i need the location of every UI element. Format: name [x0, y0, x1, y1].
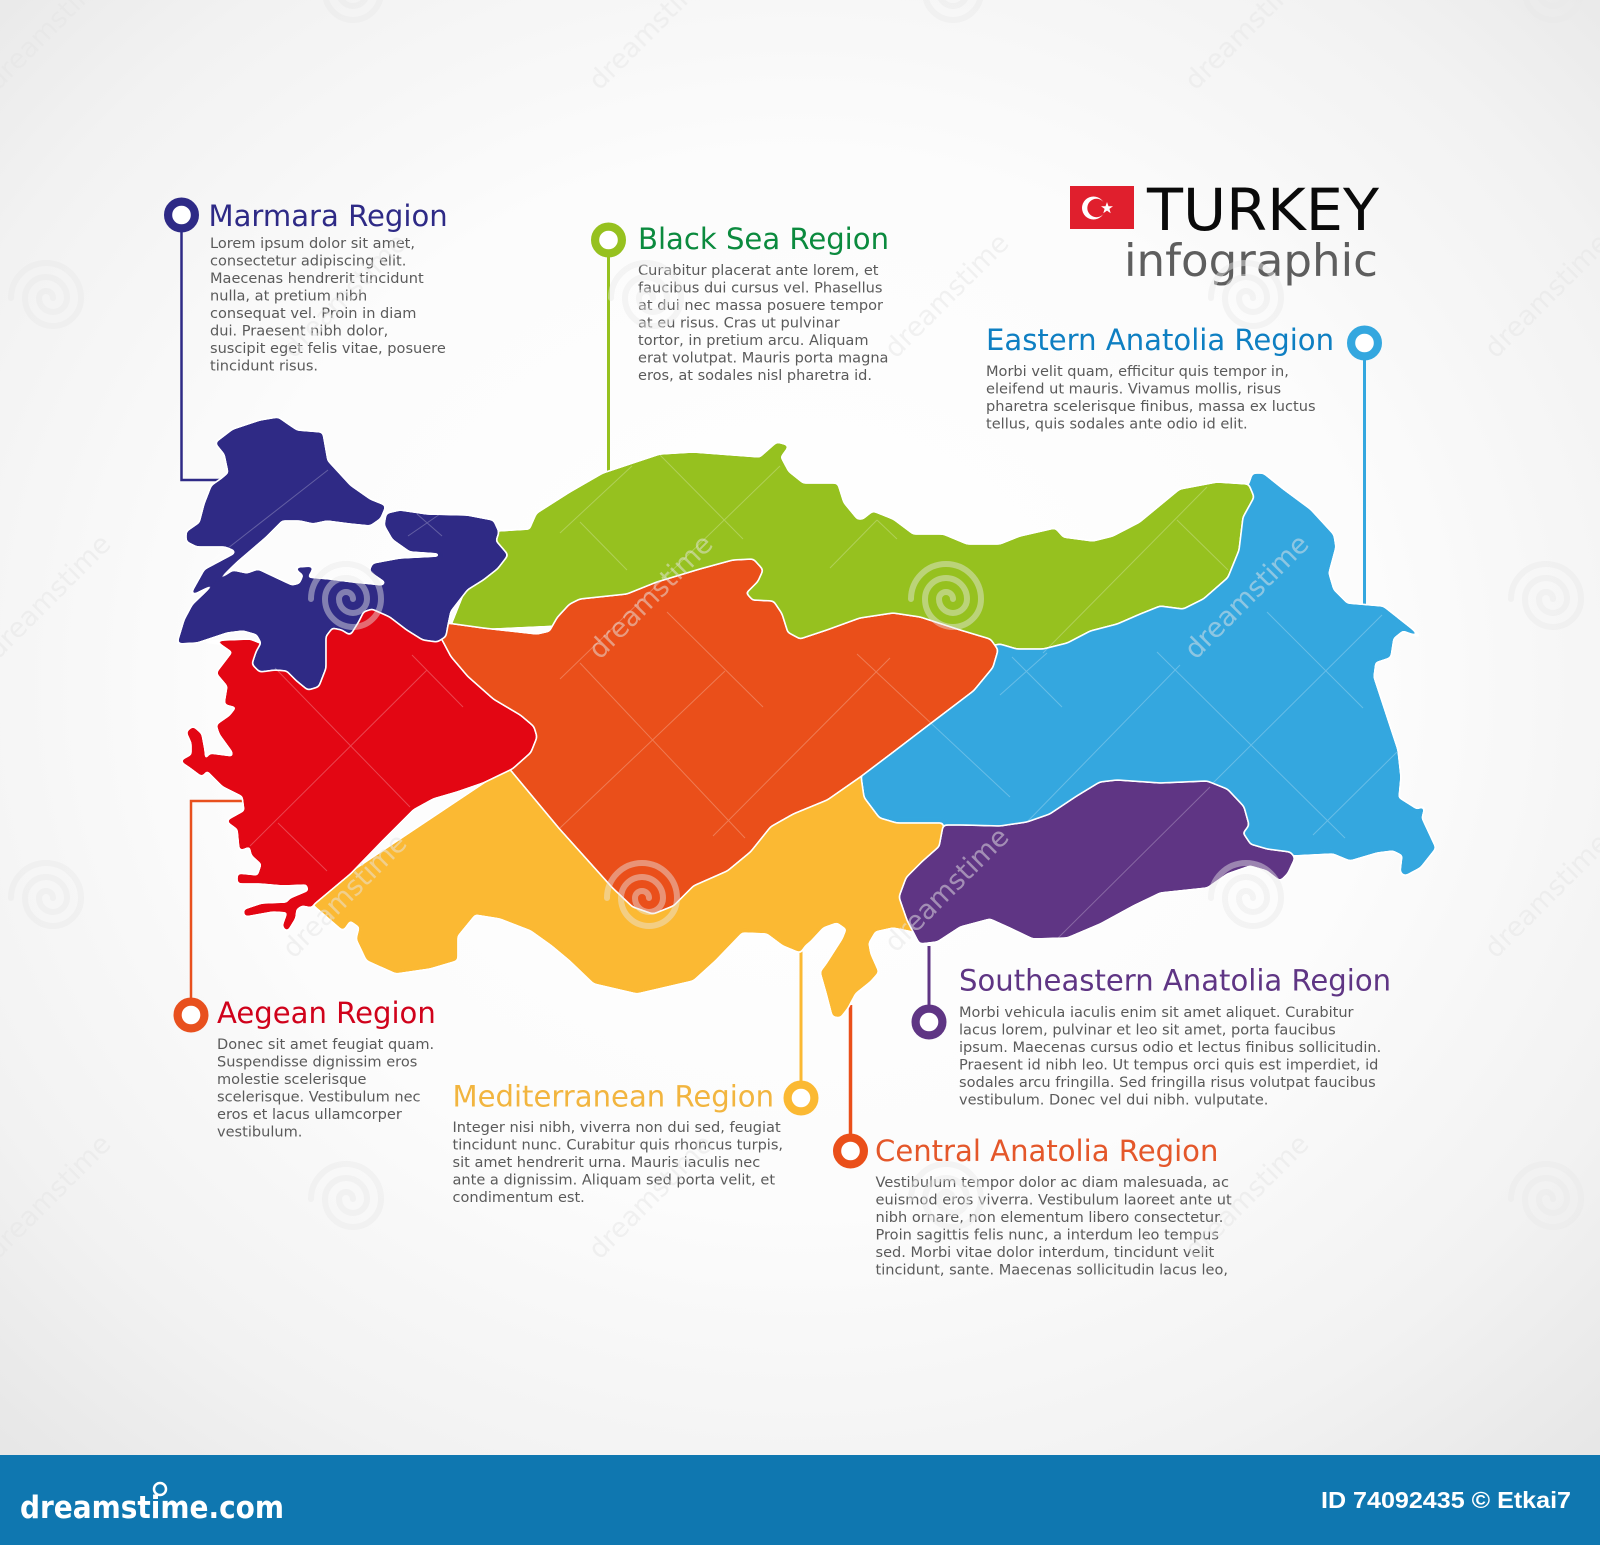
watermark spirals — [11, 0, 1581, 1227]
region: Marmara — [178, 418, 507, 689]
region: Aegean — [181, 605, 536, 931]
watermark text: dreamstime — [1179, 1129, 1315, 1265]
watermark text: dreamstime — [277, 828, 413, 964]
text block: Central Anatolia: Vestibulum tempor dolor ac diam malesuada, ac — [876, 1174, 1229, 1191]
text block: Southeastern Anatolia: ipsum. Maecenas cursus odio et lectus finibus sollicitudin. — [959, 1039, 1381, 1056]
text block: Marmara: consectetur adipiscing elit. — [210, 252, 406, 270]
text block: Central Anatolia: Proin sagittis felis nunc, a interdum leo tempus — [876, 1226, 1219, 1244]
text block: Southeastern Anatolia: sodales arcu fringilla. Sed fringilla risus volutpat faucibus — [959, 1074, 1376, 1091]
text block: Southeastern Anatolia: lacus lorem, pulvinar et leo sit amet, porta faucibus — [959, 1022, 1336, 1038]
text block: Aegean — [217, 996, 436, 1140]
region: Mediterranean — [313, 760, 950, 1017]
text block: Marmara: tincidunt risus. — [210, 358, 318, 374]
text block: Central Anatolia — [875, 1134, 1232, 1278]
text block: Central Anatolia: Central Anatolia Region — [875, 1134, 1218, 1168]
text block: Mediterranean: tincidunt nunc. Curabitur quis rhoncus turpis, — [452, 1136, 783, 1154]
text block: Marmara: Maecenas hendrerit tincidunt — [210, 270, 424, 287]
text block: Mediterranean: sit amet hendrerit urna. Mauris iaculis nec — [452, 1154, 760, 1171]
text block: Black Sea: erat volutpat. Mauris porta magna — [638, 350, 888, 366]
text block: Black Sea: tortor, in pretium arcu. Aliquam — [638, 332, 869, 349]
icon: Turkish flag — [1070, 186, 1134, 229]
leader line: Eastern Anatolia — [1363, 343, 1366, 606]
ring: Southeastern Anatolia — [916, 1009, 942, 1035]
text block: Eastern Anatolia: Eastern Anatolia Region — [986, 323, 1334, 357]
text block: Marmara: Lorem ipsum dolor sit amet, — [210, 235, 415, 252]
region: Eastern Anatolia — [862, 474, 1435, 875]
text block: Marmara: Marmara Region — [208, 199, 448, 233]
text block: Eastern Anatolia: tellus, quis sodales ante odio id elit. — [986, 416, 1248, 432]
text block: Aegean: scelerisque. Vestibulum nec — [217, 1088, 421, 1106]
text block: Mediterranean: ante a dignissim. Aliquam sed porta velit, et — [452, 1172, 775, 1188]
text block: Marmara: nulla, at pretium nibh — [210, 288, 367, 304]
text block: Mediterranean: condimentum est. — [452, 1189, 585, 1206]
text block: Black Sea: at eu risus. Cras ut pulvinar — [638, 314, 840, 332]
text block: Marmara: dui. Praesent nibh dolor, — [210, 322, 388, 340]
text block: Black Sea: Black Sea Region — [638, 222, 889, 256]
watermark text: dreamstime — [277, 228, 413, 364]
text block: Central Anatolia: nibh ornare, non elementum libero consectetur. — [876, 1209, 1223, 1226]
text block: Aegean: vestibulum. — [217, 1124, 302, 1140]
watermark text: dreamstime — [583, 1129, 719, 1265]
text block: Aegean: eros et lacus ullamcorper — [217, 1106, 402, 1123]
title: infographic — [1124, 235, 1378, 287]
text block: Aegean: Aegean Region — [217, 996, 436, 1030]
text block: Southeastern Anatolia: Praesent id nibh leo. Ut tempus orci quis est imperdiet, id — [959, 1056, 1378, 1074]
text block: Marmara: suscipit eget felis vitae, posuere — [210, 340, 446, 357]
leader line: Black Sea — [607, 240, 610, 472]
text block: Eastern Anatolia: Morbi velit quam, efficitur quis tempor in, — [986, 363, 1289, 380]
ring: Marmara — [168, 202, 195, 228]
ring: Aegean — [178, 1002, 204, 1028]
ring: Mediterranean — [788, 1085, 814, 1111]
text block: Black Sea: at dui nec massa posuere tempor — [638, 297, 883, 314]
text block: Black Sea — [638, 222, 889, 384]
watermark text: dreamstime — [1179, 529, 1315, 665]
text block: Marmara — [208, 199, 448, 374]
ring: Black Sea — [595, 227, 622, 253]
title — [1124, 176, 1380, 287]
footer logo: dreamstime.com — [20, 1490, 284, 1526]
leader line: Aegean — [191, 801, 246, 1015]
text block: Black Sea: Curabitur placerat ante lorem, et — [638, 262, 879, 279]
region: Southeastern Anatolia — [900, 781, 1294, 943]
text block: Aegean: Suspendisse dignissim eros — [217, 1054, 417, 1070]
text block: Southeastern Anatolia — [959, 964, 1391, 1108]
footer credit: ID 74092435 © Etkai7 — [1321, 1487, 1571, 1513]
leader line: Marmara — [182, 215, 224, 480]
watermark text: dreamstime — [583, 529, 719, 665]
map of Turkey — [178, 418, 1435, 1017]
text block: Southeastern Anatolia: vestibulum. Donec vel dui nibh. vulputate. — [959, 1092, 1268, 1108]
text block: Black Sea: faucibus dui cursus vel. Phasellus — [638, 280, 882, 296]
title: TURKEY — [1146, 176, 1380, 244]
text block: Central Anatolia: euismod eros viverra. Vestibulum laoreet ante ut — [876, 1192, 1232, 1208]
text block: Eastern Anatolia — [986, 323, 1334, 432]
text block: Southeastern Anatolia: Morbi vehicula iaculis enim sit amet aliquet. Curabitur — [959, 1004, 1354, 1021]
text block: Black Sea: eros, at sodales nisl pharetra id. — [638, 367, 872, 384]
Thrace — [187, 418, 385, 595]
Anatolian Marmara — [178, 511, 507, 689]
text block: Eastern Anatolia: eleifend ut mauris. Vivamus mollis, risus — [986, 380, 1281, 398]
region: Central Anatolia — [441, 560, 997, 913]
text block: Southeastern Anatolia: Southeastern Anatolia Region — [959, 964, 1391, 998]
footer band — [0, 1455, 1600, 1545]
leader line: Mediterranean — [800, 950, 802, 1098]
leader line: Central Anatolia — [849, 1005, 852, 1151]
ring: Central Anatolia — [837, 1138, 864, 1164]
watermark text: dreamstime — [879, 228, 1015, 364]
text block: Aegean: Donec sit amet feugiat quam. — [217, 1036, 434, 1053]
text block: Eastern Anatolia: pharetra scelerisque finibus, massa ex luctus — [986, 398, 1316, 415]
leader line: Southeastern Anatolia — [928, 946, 930, 1022]
watermark lines across the map — [200, 455, 1397, 938]
text block: Aegean: molestie scelerisque — [217, 1071, 367, 1088]
text block: Central Anatolia: tincidunt, sante. Maecenas sollicitudin lacus leo, — [876, 1262, 1228, 1278]
text block: Mediterranean — [452, 1080, 783, 1206]
text block: Mediterranean: Integer nisi nibh, viverra non dui sed, feugiat — [452, 1119, 781, 1136]
ring: Eastern Anatolia — [1351, 330, 1378, 356]
text block: Central Anatolia: sed. Morbi vitae dolor interdum, tincidunt velit — [876, 1244, 1215, 1261]
region: Black Sea — [450, 443, 1253, 650]
watermark text: dreamstime — [879, 822, 1015, 958]
text block: Mediterranean: Mediterranean Region — [452, 1080, 774, 1114]
text block: Marmara: consequat vel. Proin in diam — [210, 305, 416, 322]
